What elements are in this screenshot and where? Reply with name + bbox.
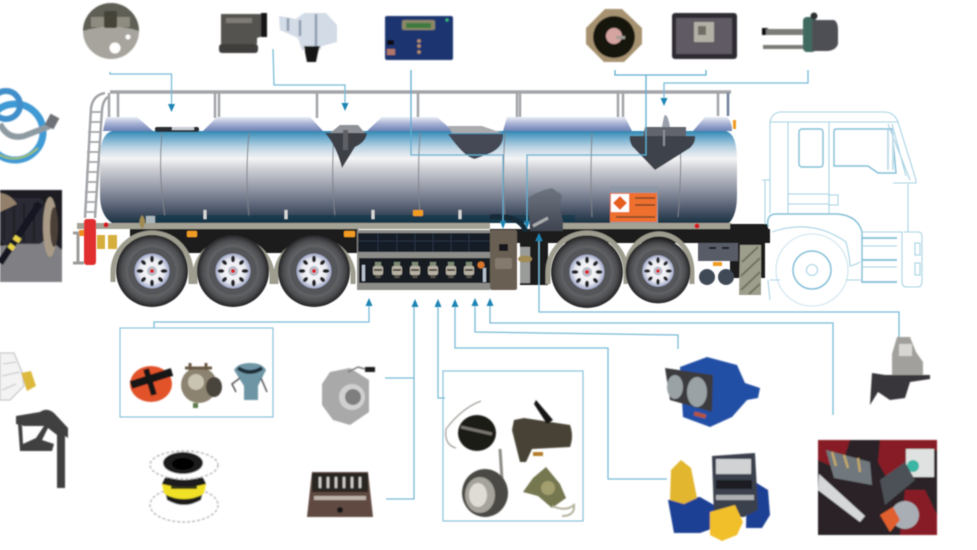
icon: hose reel photo: [0, 190, 62, 282]
icon: grey-blue camlock coupling: [232, 363, 267, 400]
icon: olive vapour coupler with cord: [523, 467, 574, 516]
side pipe and dark hose: [490, 217, 526, 232]
icon: probe sensor: [762, 12, 838, 52]
dome valve cut-out: [630, 115, 695, 170]
icon: control box: [672, 13, 737, 59]
tank barrel: [100, 131, 737, 223]
icon: rubber expansion joint: [150, 451, 218, 522]
icon: flow meter with filter: [668, 453, 770, 541]
icon: blue gear pump: [665, 357, 760, 427]
water tank: [528, 188, 563, 231]
icon: blue fuel hose coil: [0, 91, 55, 160]
safety handrail: [85, 92, 731, 218]
connector arrows: [168, 98, 668, 307]
rear axle tanks and box: [698, 243, 761, 295]
icon: silver vent valve: [279, 13, 337, 62]
icon: tank inspection disc: [83, 3, 139, 59]
manhole cover: [155, 127, 199, 132]
icon: octagonal flange valve: [586, 9, 642, 62]
icon: metal pump: [181, 363, 222, 408]
icon: black dust cap with wire: [446, 401, 496, 451]
icon: dark vapour valve: [219, 13, 267, 53]
icon: silver dust plug: [462, 449, 508, 517]
icon: electronic switch panel: [307, 472, 373, 517]
vapour valve cut-out: [325, 125, 367, 168]
hazard placard: [610, 187, 658, 223]
callout box: couplings: [120, 328, 273, 417]
rear fenders: [113, 233, 692, 284]
bottom loading cabinet: [357, 230, 517, 290]
icon: dark gravity coupler: [512, 400, 572, 462]
icon: white coupling with brass tip: [0, 353, 36, 400]
icon: blue control panel: [385, 16, 453, 60]
marker lamps: [187, 120, 736, 266]
connector lines: [110, 49, 899, 499]
chassis: [73, 215, 770, 285]
rear fire extinguisher: [84, 219, 96, 265]
callout box: caps and adapters: [443, 371, 583, 521]
icon: fuel nozzle: [16, 410, 68, 488]
control unit cut-out: [448, 126, 503, 159]
truck cab outline: [762, 112, 922, 306]
icon: elbow foot valve: [870, 337, 930, 405]
rear wheels: [116, 235, 690, 308]
icon: engine bay photo: [818, 440, 937, 535]
icon: grey ball valve: [322, 367, 375, 425]
icon: red blind flange: [130, 366, 172, 402]
tank roof sections: [103, 117, 732, 131]
